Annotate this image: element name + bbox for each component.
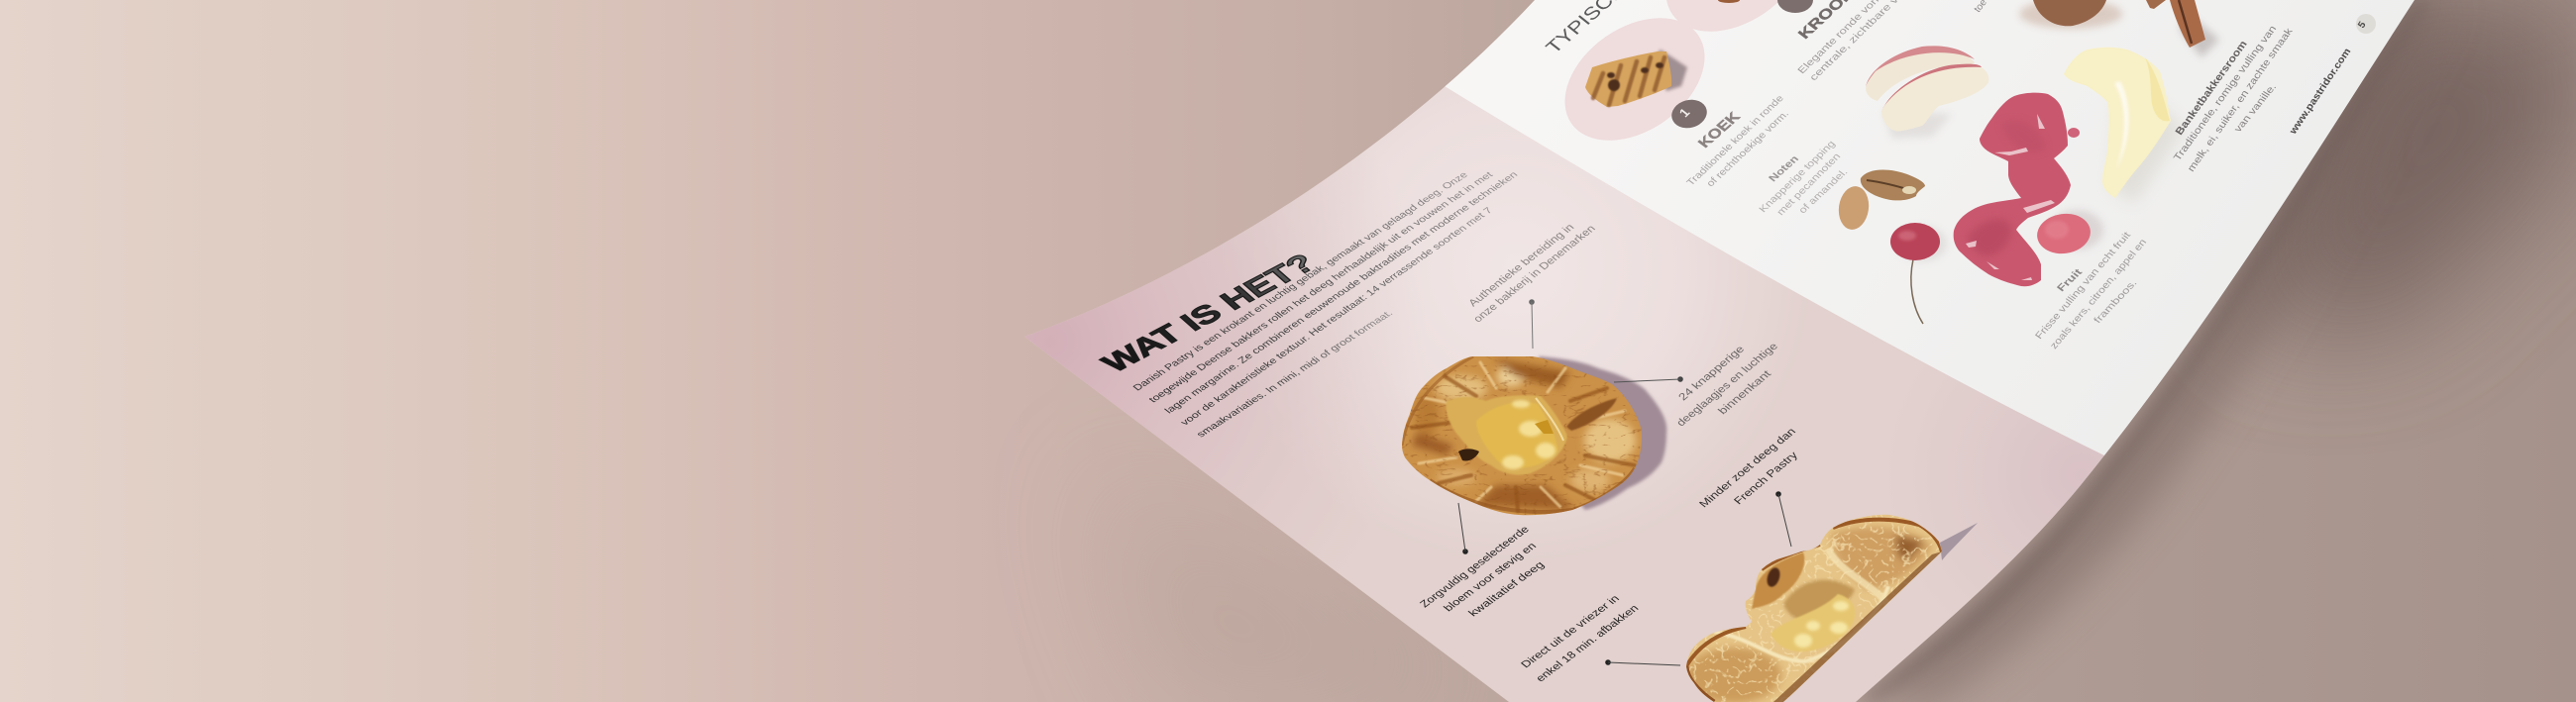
- callout: deeglaagjes: [1614, 342, 1780, 429]
- fruit text: [2033, 231, 2149, 351]
- icon: raspberry: [2034, 210, 2103, 257]
- fruit text: Frisse vulling van echt fruit: [2033, 231, 2133, 342]
- callout: minder zoet deeg: Minder zoet deeg dan: [1697, 426, 1798, 510]
- pastry: cut danish cross-section: [1684, 510, 1978, 702]
- text block: intro: lagen margarine. Ze combineren eeuwenoude baktradities met moderne technieken: [1163, 170, 1521, 416]
- pink circle with cookie: [1542, 0, 1728, 165]
- icon: cherry: [1890, 223, 1947, 324]
- noten text: of amandel.: [1797, 167, 1851, 216]
- callout: minder zoet deeg: French Pastry: [1732, 450, 1801, 507]
- callout: authentieke bereiding: Authentieke bereiding in: [1466, 222, 1577, 309]
- pink circle 2: [1643, 0, 1829, 56]
- kroon description: [1796, 0, 1923, 83]
- banketbakkersroom text: melk, ei, suiker, en zachte smaak: [2186, 26, 2296, 174]
- icon: jam drop: [2068, 128, 2080, 138]
- koek description: of rechthoekige vorm.: [1705, 109, 1791, 189]
- noten text: met pecannoten: [1775, 151, 1843, 218]
- koek description: Traditionele koek in ronde: [1685, 93, 1786, 188]
- callout: direct uit de vriezer: enkel 18 min. afbakken: [1534, 603, 1642, 684]
- banketbakkersroom text: [2172, 24, 2296, 174]
- icon: jam smear: [1954, 93, 2071, 286]
- callout: deeglaagjes: deeglaagjes en luchtige: [1674, 342, 1780, 429]
- badge 1: 1: [1676, 106, 1693, 120]
- noten text: Knapperige topping: [1758, 140, 1838, 215]
- banketbakkersroom text: Banketbakkersroom: [2173, 39, 2250, 138]
- icon: cream smear: [2064, 48, 2185, 203]
- page number badge: 5: [2356, 20, 2369, 31]
- icon: almond: [1836, 184, 1872, 232]
- fruit text: Fruit: [2056, 267, 2086, 294]
- small pastry piece: [1718, 0, 1740, 3]
- panel: white upper section: [1445, 0, 2415, 455]
- banketbakkersroom text: van vanille.: [2232, 82, 2279, 135]
- badge 1: [1668, 96, 1710, 132]
- fruit text: zoals kers, citroen, appel en: [2048, 238, 2149, 351]
- text block: intro: [1131, 170, 1521, 440]
- callout: minder zoet deeg: [1697, 426, 1801, 547]
- type 1: koek: [1542, 0, 1791, 189]
- heading: wat is het: WAT IS HET?: [1095, 249, 1323, 378]
- kroon description: centrale, zichtbare vulling: [1808, 0, 1923, 83]
- icon: cinnamon stick: [2146, 0, 2219, 57]
- badge 2: [1777, 0, 1813, 13]
- callout: zorgvuldig geselecteerde bloem: [1418, 503, 1548, 619]
- crumb holes: [1686, 527, 1932, 702]
- callout: deeglaagjes: binnenkant: [1716, 368, 1773, 417]
- banketbakkersroom text: Traditionele, romige vulling van: [2172, 24, 2279, 163]
- callout: zorgvuldig geselecteerde bloem: bloem voor stevig en: [1442, 541, 1539, 614]
- type 2: kroon: [1643, 0, 1923, 83]
- page number badge: [2356, 14, 2376, 34]
- icon: apple slices: [1866, 46, 1988, 139]
- callout: authentieke bereiding: [1466, 222, 1598, 349]
- panel: pink lower section: [991, 59, 2180, 702]
- sheet of paper: [1024, 0, 2415, 702]
- callout: direct uit de vriezer: [1519, 593, 1680, 684]
- noten text: Noten: [1768, 154, 1801, 184]
- fruit text: framboos.: [2092, 278, 2140, 326]
- callout: direct uit de vriezer: Direct uit de vriezer in: [1519, 593, 1622, 670]
- icon: cinnamon powder: [2019, 0, 2122, 29]
- callout: zorgvuldig geselecteerde bloem: Zorgvuldig geselecteerde: [1418, 524, 1532, 610]
- noten text: [1758, 140, 1851, 218]
- koek label: KOEK: [1695, 109, 1744, 150]
- callout: authentieke bereiding: onze bakkerij in Denemarken: [1471, 224, 1598, 325]
- text block: intro: voor de karakteristieke textuur. Het resultaat: 14 verrassende soorten met 7: [1179, 206, 1496, 428]
- website url: www.pastridor.com: [2288, 47, 2353, 138]
- icon: pecan: [1861, 169, 1925, 200]
- text block: intro: smaakvariaties. In mini, midi of groot formaat.: [1195, 309, 1396, 440]
- callout: zorgvuldig geselecteerde bloem: kwalitatief deeg: [1466, 559, 1548, 619]
- text block: intro: Danish Pastry is een krokant en luchtig gebak, gemaakt van gelaagd deeg. Onze: [1131, 170, 1471, 393]
- pastry: round danish top view: [1397, 347, 1666, 520]
- callout: deeglaagjes: 24 knapperige: [1676, 344, 1747, 403]
- text block: intro: toegewijde Deense bakkers rollen het deeg herhaaldelijk uit en vouwen het in met: [1147, 170, 1496, 405]
